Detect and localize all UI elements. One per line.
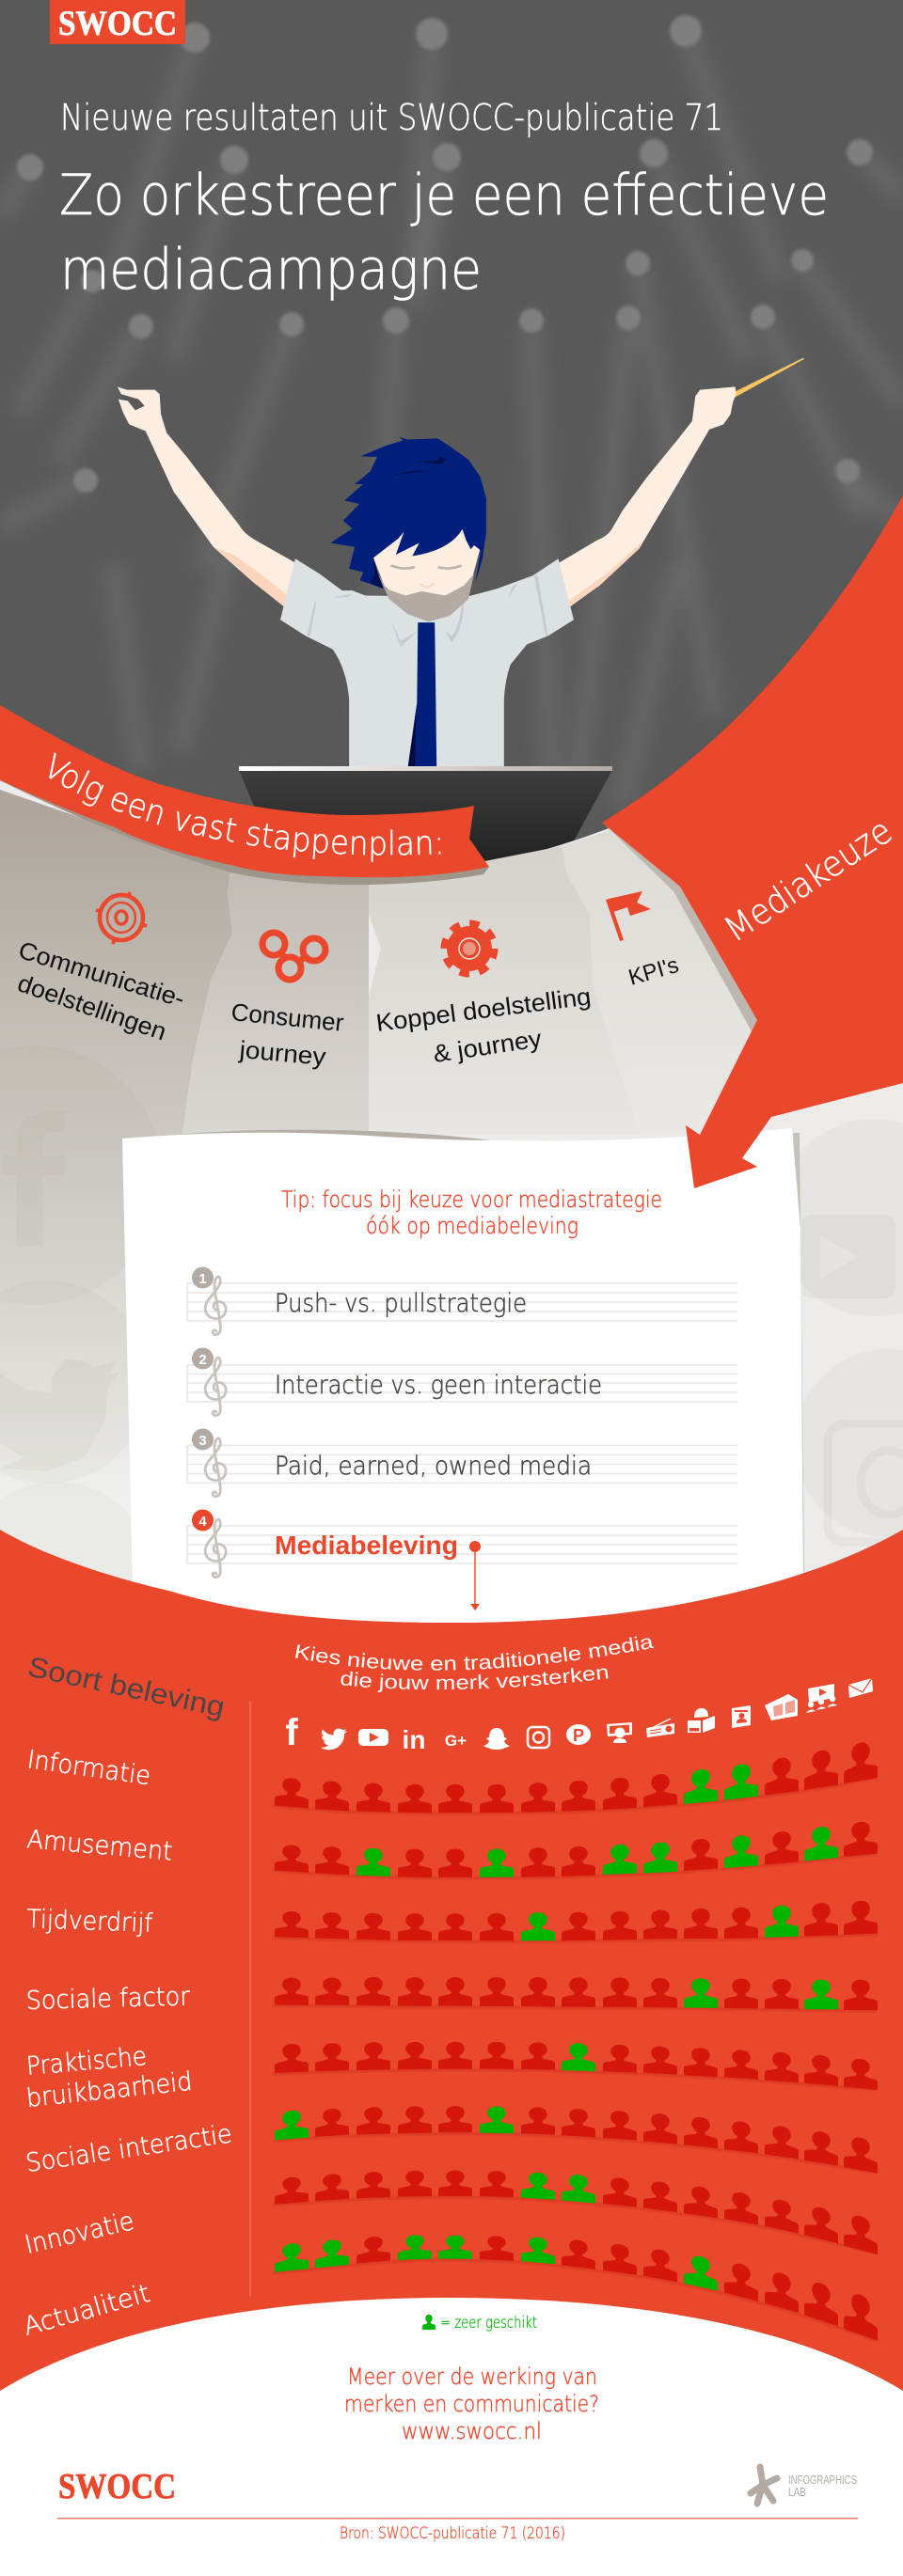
subtitle: Nieuwe resultaten uit SWOCC-publicatie 71 [60, 97, 723, 138]
icon: cinema audience [806, 1684, 837, 1713]
stage background with spotlights [0, 0, 903, 903]
audience row: Tijdverdrijf [275, 1900, 878, 1940]
icon: facebook: f [285, 1712, 298, 1753]
row labels: Innovatie [23, 2207, 137, 2260]
row labels: Tijdverdrijf [26, 1905, 153, 1939]
legend: zeer geschikt: = zeer geschikt [440, 2314, 537, 2333]
legend: zeer geschikt [422, 2314, 537, 2333]
icon: three linked rings [262, 933, 325, 980]
row shadows [273, 1778, 877, 2341]
row labels: Amusement [25, 1825, 174, 1866]
step 3: koppel doelstelling en journey: Koppel doelstelling [374, 982, 593, 1037]
title: mediacampagne [60, 237, 482, 303]
audience row: Sociale interactie [275, 2106, 878, 2173]
call to action [344, 2364, 599, 2444]
tip text: Tip: focus bij keuze voor mediastrategie [281, 1186, 662, 1213]
step 2: consumer journey: journey [237, 1035, 327, 1071]
background ghost social icons [0, 1045, 903, 1677]
icon: pinterest [566, 1724, 591, 1745]
icon: person with newspaper [688, 1708, 715, 1733]
step 3: koppel doelstelling en journey: & journey [431, 1024, 544, 1068]
lectern [239, 766, 612, 874]
icon: target [96, 892, 147, 944]
arrow: from mediabeleving to table [469, 1541, 481, 1610]
media icon row [285, 1678, 873, 1754]
row labels: Praktische [25, 2042, 148, 2081]
row labels: Actualiteit [21, 2279, 153, 2342]
banner: Volg een vast stappenplan [0, 705, 489, 886]
heading: kies nieuwe en traditionele media: Kies nieuwe en traditionele media [295, 1636, 655, 1671]
step 1: communicatiedoelstellingen [14, 892, 188, 1045]
logo: SWOCC footer: SWOCC [58, 2467, 176, 2506]
audience row: Informatie [275, 1740, 878, 1813]
music staff 3: paid, earned, owned media [187, 1429, 737, 1497]
row labels: Informatie [25, 1745, 152, 1791]
tip text: óók op mediabeleving [366, 1213, 578, 1239]
call to action: www.swocc.nl [402, 2418, 542, 2444]
logo: SWOCC top: SWOCC [58, 5, 177, 43]
icon: snapchat [483, 1728, 510, 1750]
icon: youtube [358, 1729, 388, 1746]
icon: instagram [528, 1727, 549, 1748]
icon: flag [606, 891, 651, 941]
call to action: merken en communicatie? [344, 2391, 599, 2417]
step 2: consumer journey: Consumer [230, 997, 345, 1037]
music staff 4: mediabeleving: Mediabeleving [275, 1531, 458, 1560]
audience row: Sociale factor [275, 1977, 878, 2010]
icon: television [607, 1722, 632, 1743]
music staff 3: paid, earned, owned media: Paid, earned, owned media [275, 1452, 592, 1481]
call to action: Meer over de werking van [347, 2364, 597, 2390]
footer rule [57, 2518, 858, 2520]
icon: newspaper [765, 1694, 798, 1720]
sheet of music paper [122, 1128, 804, 1589]
icon: linkedin: in [403, 1725, 425, 1754]
icon: gear [444, 923, 495, 974]
source line: Bron: SWOCC-publicatie 71 (2016) [340, 2524, 565, 2543]
big red arrow: Mediakeuze [602, 495, 903, 1188]
music staff 1: push- vs. pullstrategie: Push- vs. pullstrategie [275, 1289, 527, 1318]
divider [250, 1701, 251, 2297]
row labels: Sociale factor [25, 1982, 191, 2016]
row labels: Sociale interactie [24, 2119, 234, 2178]
music staff 4: mediabeleving [187, 1510, 737, 1578]
music staff 4: mediabeleving: 4 [198, 1514, 207, 1530]
audience row: Innovatie [275, 2170, 878, 2254]
row labels [21, 1745, 234, 2342]
music staff 2: interactie vs. geen interactie: 2 [198, 1352, 207, 1368]
conductor illustration [118, 358, 804, 766]
tip text [281, 1186, 662, 1239]
red lower section background [0, 1530, 903, 2391]
step 1: communicatiedoelstellingen: Communicatie- [15, 935, 188, 1013]
music staff 2: interactie vs. geen interactie: Interactie vs. geen interactie [275, 1371, 602, 1400]
heading: kies nieuwe en traditionele media: die jouw merk versterken [341, 1668, 608, 1692]
icon: email [848, 1678, 873, 1698]
heading: soort beleving: Soort beleving [25, 1652, 228, 1723]
icon: twitter [321, 1728, 347, 1750]
logo: infographics lab: INFOGRAPHICS [788, 2473, 857, 2487]
banner: Volg een vast stappenplan: Volg een vast stappenplan: [49, 752, 440, 862]
floor with step panels [0, 752, 903, 1598]
icon: radio [646, 1719, 674, 1737]
step 2: consumer journey [230, 933, 345, 1071]
heading: kies nieuwe en traditionele media [295, 1636, 655, 1692]
row labels: bruikbaarheid [24, 2067, 194, 2113]
title [59, 163, 829, 303]
audience row: Praktische bruikbaarheid [275, 2042, 878, 2090]
icon: google plus: G+ [445, 1732, 467, 1750]
icon: magazine [732, 1705, 751, 1728]
step 4: KPI's: KPI's [626, 952, 682, 991]
music staff 1: push- vs. pullstrategie: 1 [198, 1271, 207, 1287]
music staff 1: push- vs. pullstrategie [187, 1267, 737, 1335]
icon: pinterest: P [573, 1726, 584, 1745]
logo: infographics lab [751, 2467, 857, 2504]
audience row: Actualiteit [275, 2235, 878, 2341]
paper bottom under arc [133, 1542, 803, 1623]
step 3: koppel doelstelling en journey [374, 923, 593, 1068]
step 1: communicatiedoelstellingen: doelstellingen [14, 968, 170, 1045]
music staff 2: interactie vs. geen interactie [187, 1348, 737, 1416]
audience row: Amusement [275, 1820, 878, 1877]
logo: infographics lab: LAB [788, 2485, 806, 2499]
step 4: KPI's [606, 891, 682, 991]
music staff 3: paid, earned, owned media: 3 [198, 1433, 207, 1449]
